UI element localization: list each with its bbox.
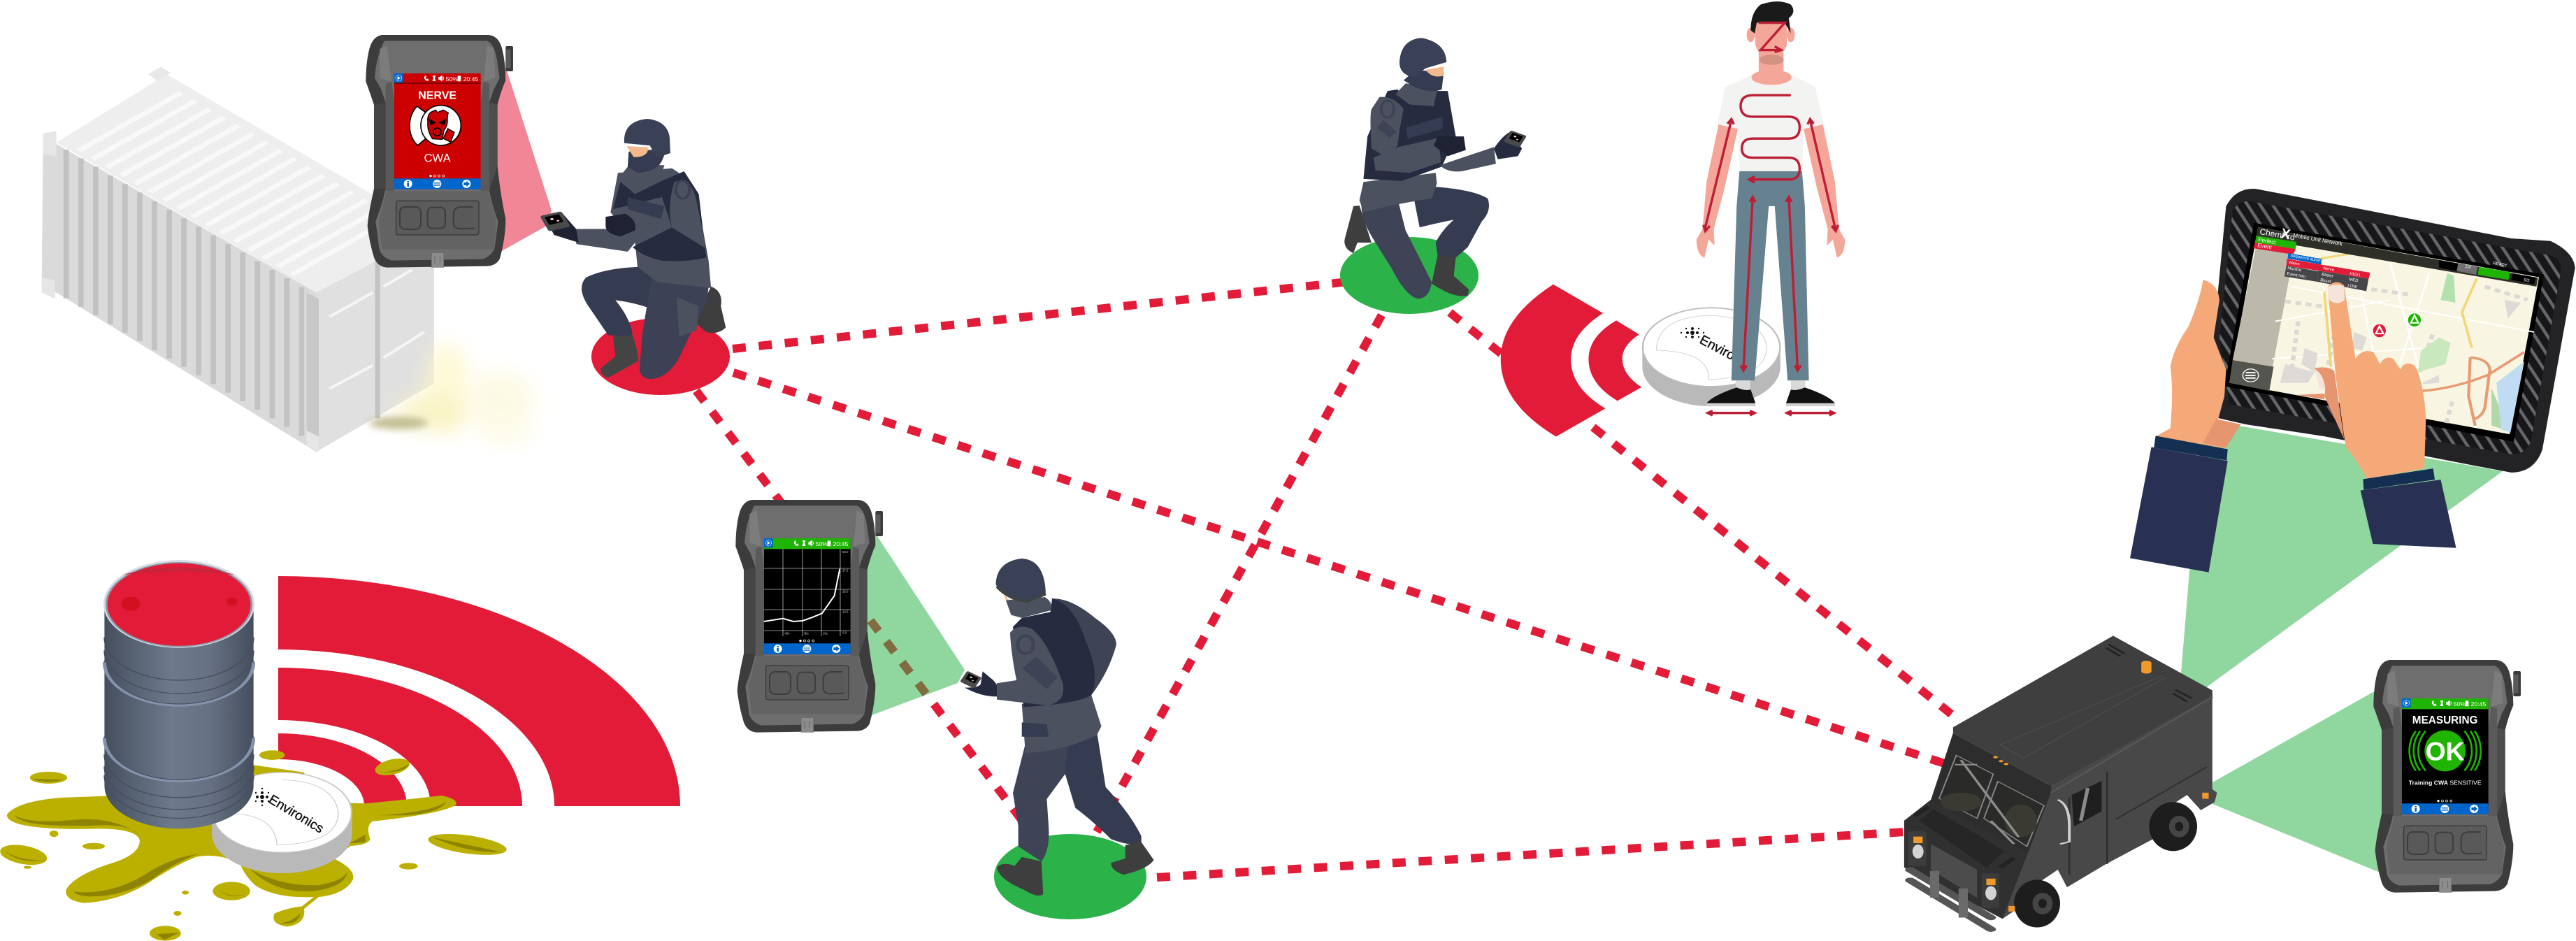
tablet interface labels: HIGH [2350, 272, 2360, 278]
tablet interface labels: Blood [2320, 278, 2331, 285]
surface sensor under person [1642, 308, 1780, 406]
tablet interface labels: X [2280, 226, 2292, 243]
handheld detector 1: NERVE CWA alarm: 50% [446, 76, 458, 82]
handheld detector 2: live graph: 20:45 [833, 540, 848, 547]
tablet interface labels: MED [2349, 278, 2359, 283]
icon: Environics logo dots [1681, 327, 1704, 338]
tablet body [2214, 189, 2575, 473]
handheld detector 1: NERVE CWA alarm [366, 35, 513, 268]
tablet interface labels: Nerve [2323, 266, 2335, 273]
tablet interface labels [2257, 226, 2531, 292]
green status disc under walking operator [994, 834, 1146, 919]
dotted network links [696, 278, 1959, 877]
tablet interface labels: Event Info [2287, 272, 2306, 280]
tablet interface labels: READY [2493, 261, 2507, 268]
label: CWA: CWA [424, 152, 452, 165]
chart: concentration trace: 0.0 [842, 631, 847, 635]
large red wave from drum sensor [278, 576, 680, 806]
tablet interface labels: Event [2257, 242, 2273, 251]
tablet operator console [2130, 189, 2575, 573]
drum surface sensor: Environics [266, 792, 326, 836]
label: Training CWA SENSITIVE: Training CWA SENSITIVE [2409, 779, 2482, 786]
tablet interface labels: Alarm [2289, 261, 2300, 267]
icon: Environics logo dots [255, 788, 269, 806]
handheld detector 1: NERVE CWA alarm: 20:45 [463, 76, 478, 82]
chart: concentration trace: 15s [823, 632, 828, 635]
steel drum with red lid [103, 560, 254, 828]
standing person with swab sampling path [1697, 1, 1845, 415]
surface sensor under person: Environics [1697, 333, 1758, 375]
green scan beam from detector 2 [839, 503, 965, 715]
drum surface sensor [212, 773, 352, 873]
green beam from van to detector 3 [2212, 664, 2405, 888]
tablet interface labels: ChemPro [2259, 227, 2296, 243]
tablet interface labels: 1/4 [2465, 265, 2472, 271]
red proximity wave from surface sensor on person [1501, 285, 1641, 437]
icon: red alert marker [2373, 324, 2387, 338]
heading: NERVE: NERVE [418, 90, 456, 102]
icon: gas mask severity gauge [410, 106, 461, 145]
green status disc under kneeling operator [1340, 237, 1478, 314]
armoured response van [1904, 635, 2217, 929]
chart: concentration trace: 12.5 [842, 610, 849, 614]
tablet interface labels: 5/5 [2524, 278, 2531, 284]
tablet interface labels: Perfect [2258, 236, 2277, 246]
tablet interface labels: Sequence automated [2290, 254, 2330, 265]
kneeling operator with detector, on red disc [540, 119, 726, 379]
icon: green status marker [2408, 313, 2422, 327]
chart: concentration trace: 45s [784, 632, 789, 635]
tablet interface labels: Blister [2322, 273, 2333, 279]
yellow chemical vapour cloud [369, 343, 535, 443]
chart: concentration trace [764, 549, 851, 636]
yellow liquid spill [0, 750, 510, 941]
tablet interface labels: Choking [2319, 285, 2334, 292]
handheld detector 3: measuring OK: 20:45 [2471, 701, 2486, 707]
handheld detector 2: live graph [735, 500, 883, 733]
red alarm disc [591, 318, 730, 395]
map features [2272, 249, 2534, 432]
tablet interface labels: Monitor [2287, 266, 2301, 273]
chart: concentration trace: 25.0 [842, 589, 849, 593]
shipping container [42, 66, 434, 452]
icon: amber beacon [2141, 661, 2152, 674]
icon: OK status rings: OK [2426, 736, 2465, 766]
kneeling operator on green disc [1344, 38, 1527, 299]
chart: concentration trace: 30s [804, 632, 809, 635]
tablet interface labels: Mobile Unit Network [2293, 232, 2344, 247]
handheld detector 3: measuring OK [2373, 660, 2521, 893]
walking operator with detector and backpack [960, 559, 1154, 896]
heading: MEASURING: MEASURING [2412, 714, 2477, 726]
handheld detector 2: live graph: 50% [816, 540, 828, 547]
chart: concentration trace: 50.0 [842, 550, 849, 554]
chart: concentration trace: 37.5 [842, 568, 849, 572]
hands and sleeves [2130, 280, 2456, 573]
icon: OK status rings [2410, 728, 2481, 773]
handheld detector 3: measuring OK: 50% [2454, 701, 2466, 707]
tablet interface labels: LOW [2347, 284, 2357, 289]
red scan beam from detector 1 [489, 42, 552, 252]
green beam from van to tablet [2181, 419, 2503, 688]
